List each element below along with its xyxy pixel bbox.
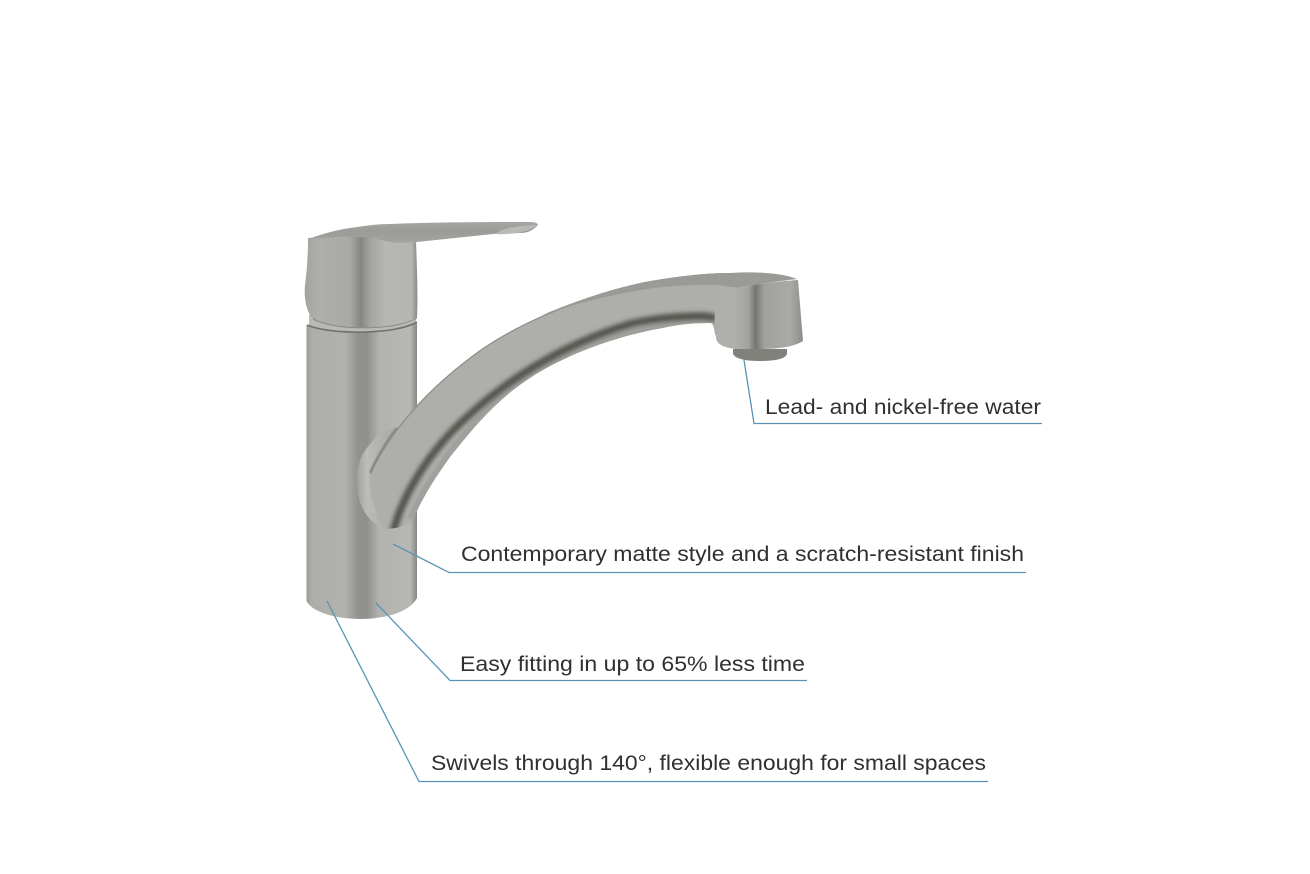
faucet spout head — [715, 280, 803, 349]
spout top bevel — [540, 272, 797, 316]
spout crease — [370, 428, 397, 473]
faucet lever — [308, 222, 538, 243]
callout: easy fitting: Easy fitting in up to 65% less time — [460, 653, 805, 676]
faucet handle cap — [305, 234, 417, 328]
callout: matte style and finish — [393, 543, 1026, 572]
callout: swivel range: Swivels through 140°, flexible enough for small spaces — [431, 752, 986, 775]
faucet body — [306, 322, 417, 619]
callout: lead- and nickel-free water — [744, 360, 1042, 424]
faucet aerator — [733, 349, 787, 361]
callout: matte style and finish: Contemporary matte style and a scratch-resistant finish — [461, 543, 1024, 566]
callout: lead- and nickel-free water: Lead- and nickel-free water — [765, 396, 1041, 419]
callout: swivel range — [327, 601, 988, 782]
faucet illustration — [305, 222, 803, 619]
spout base swoosh — [357, 427, 410, 528]
callout: easy fitting — [376, 603, 807, 680]
faucet spout — [370, 272, 803, 528]
faucet ring — [309, 315, 416, 332]
